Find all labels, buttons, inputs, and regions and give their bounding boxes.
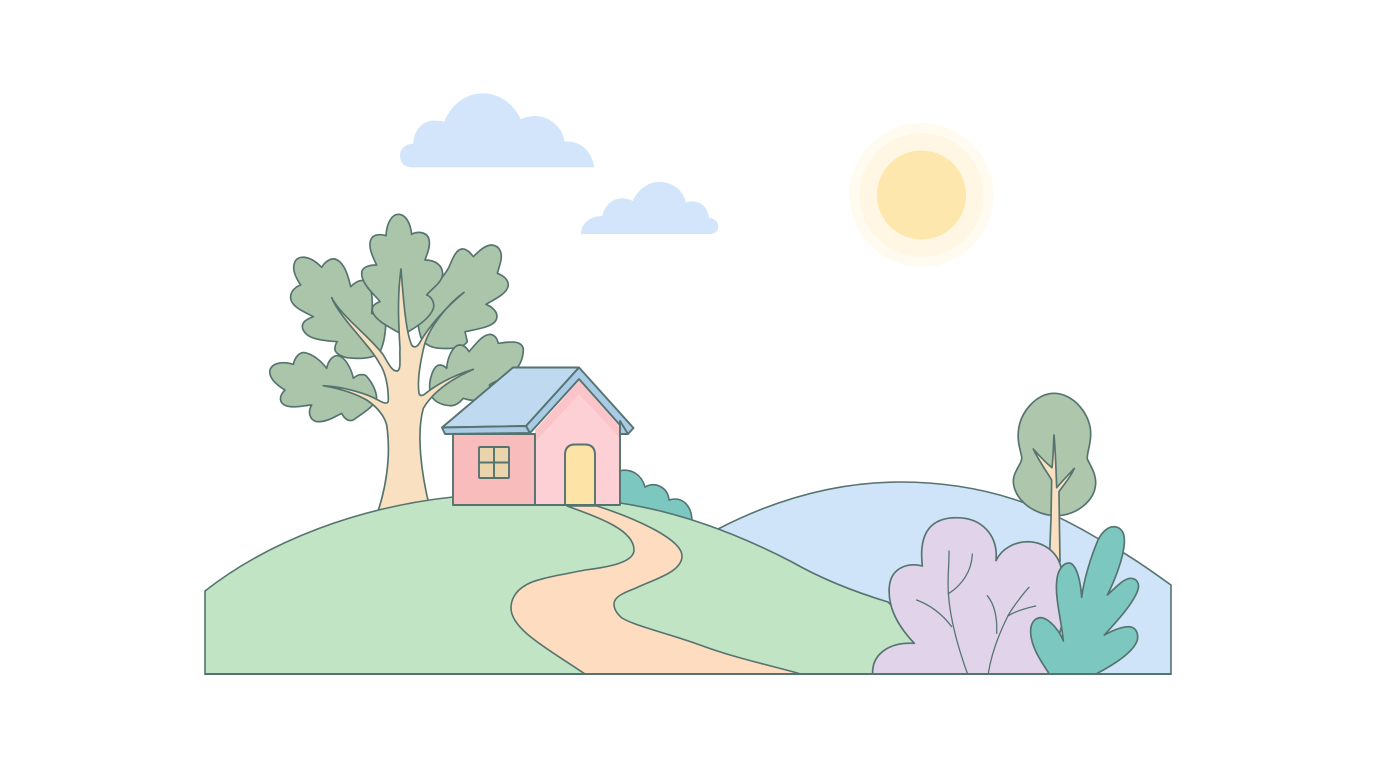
lilac veins [917, 551, 1036, 673]
house [442, 368, 634, 505]
house: window [479, 447, 509, 478]
leaf cluster: top [362, 214, 443, 332]
house: right eave [620, 421, 628, 434]
house: right gable wall [535, 379, 620, 505]
small tree [1013, 393, 1096, 562]
small tree trunk [1033, 435, 1074, 562]
path: winding road [511, 506, 801, 674]
house: roof eave [442, 426, 530, 434]
large tree trunk [323, 269, 473, 515]
foreground plant: teal [1031, 527, 1139, 674]
house: door [565, 444, 595, 505]
near hill: green [205, 495, 960, 674]
house: main roof [442, 368, 579, 428]
ground line [205, 673, 1171, 675]
large tree [270, 214, 523, 515]
house: gable trim [526, 368, 634, 434]
cloud: small [581, 182, 718, 234]
far hill: blue [700, 482, 1171, 674]
small tree canopy [1013, 393, 1096, 516]
leaf cluster: upper right [418, 245, 508, 348]
cloud: large [400, 93, 594, 167]
lilac foliage [873, 518, 1063, 674]
sun [850, 123, 994, 267]
foreground shrub: lilac [873, 518, 1063, 674]
leaf cluster: lower left [270, 353, 377, 422]
house: left wall [453, 434, 535, 505]
leaf cluster: upper left [291, 257, 386, 358]
teal bush behind house [615, 470, 692, 522]
leaf cluster: lower right [430, 334, 523, 406]
